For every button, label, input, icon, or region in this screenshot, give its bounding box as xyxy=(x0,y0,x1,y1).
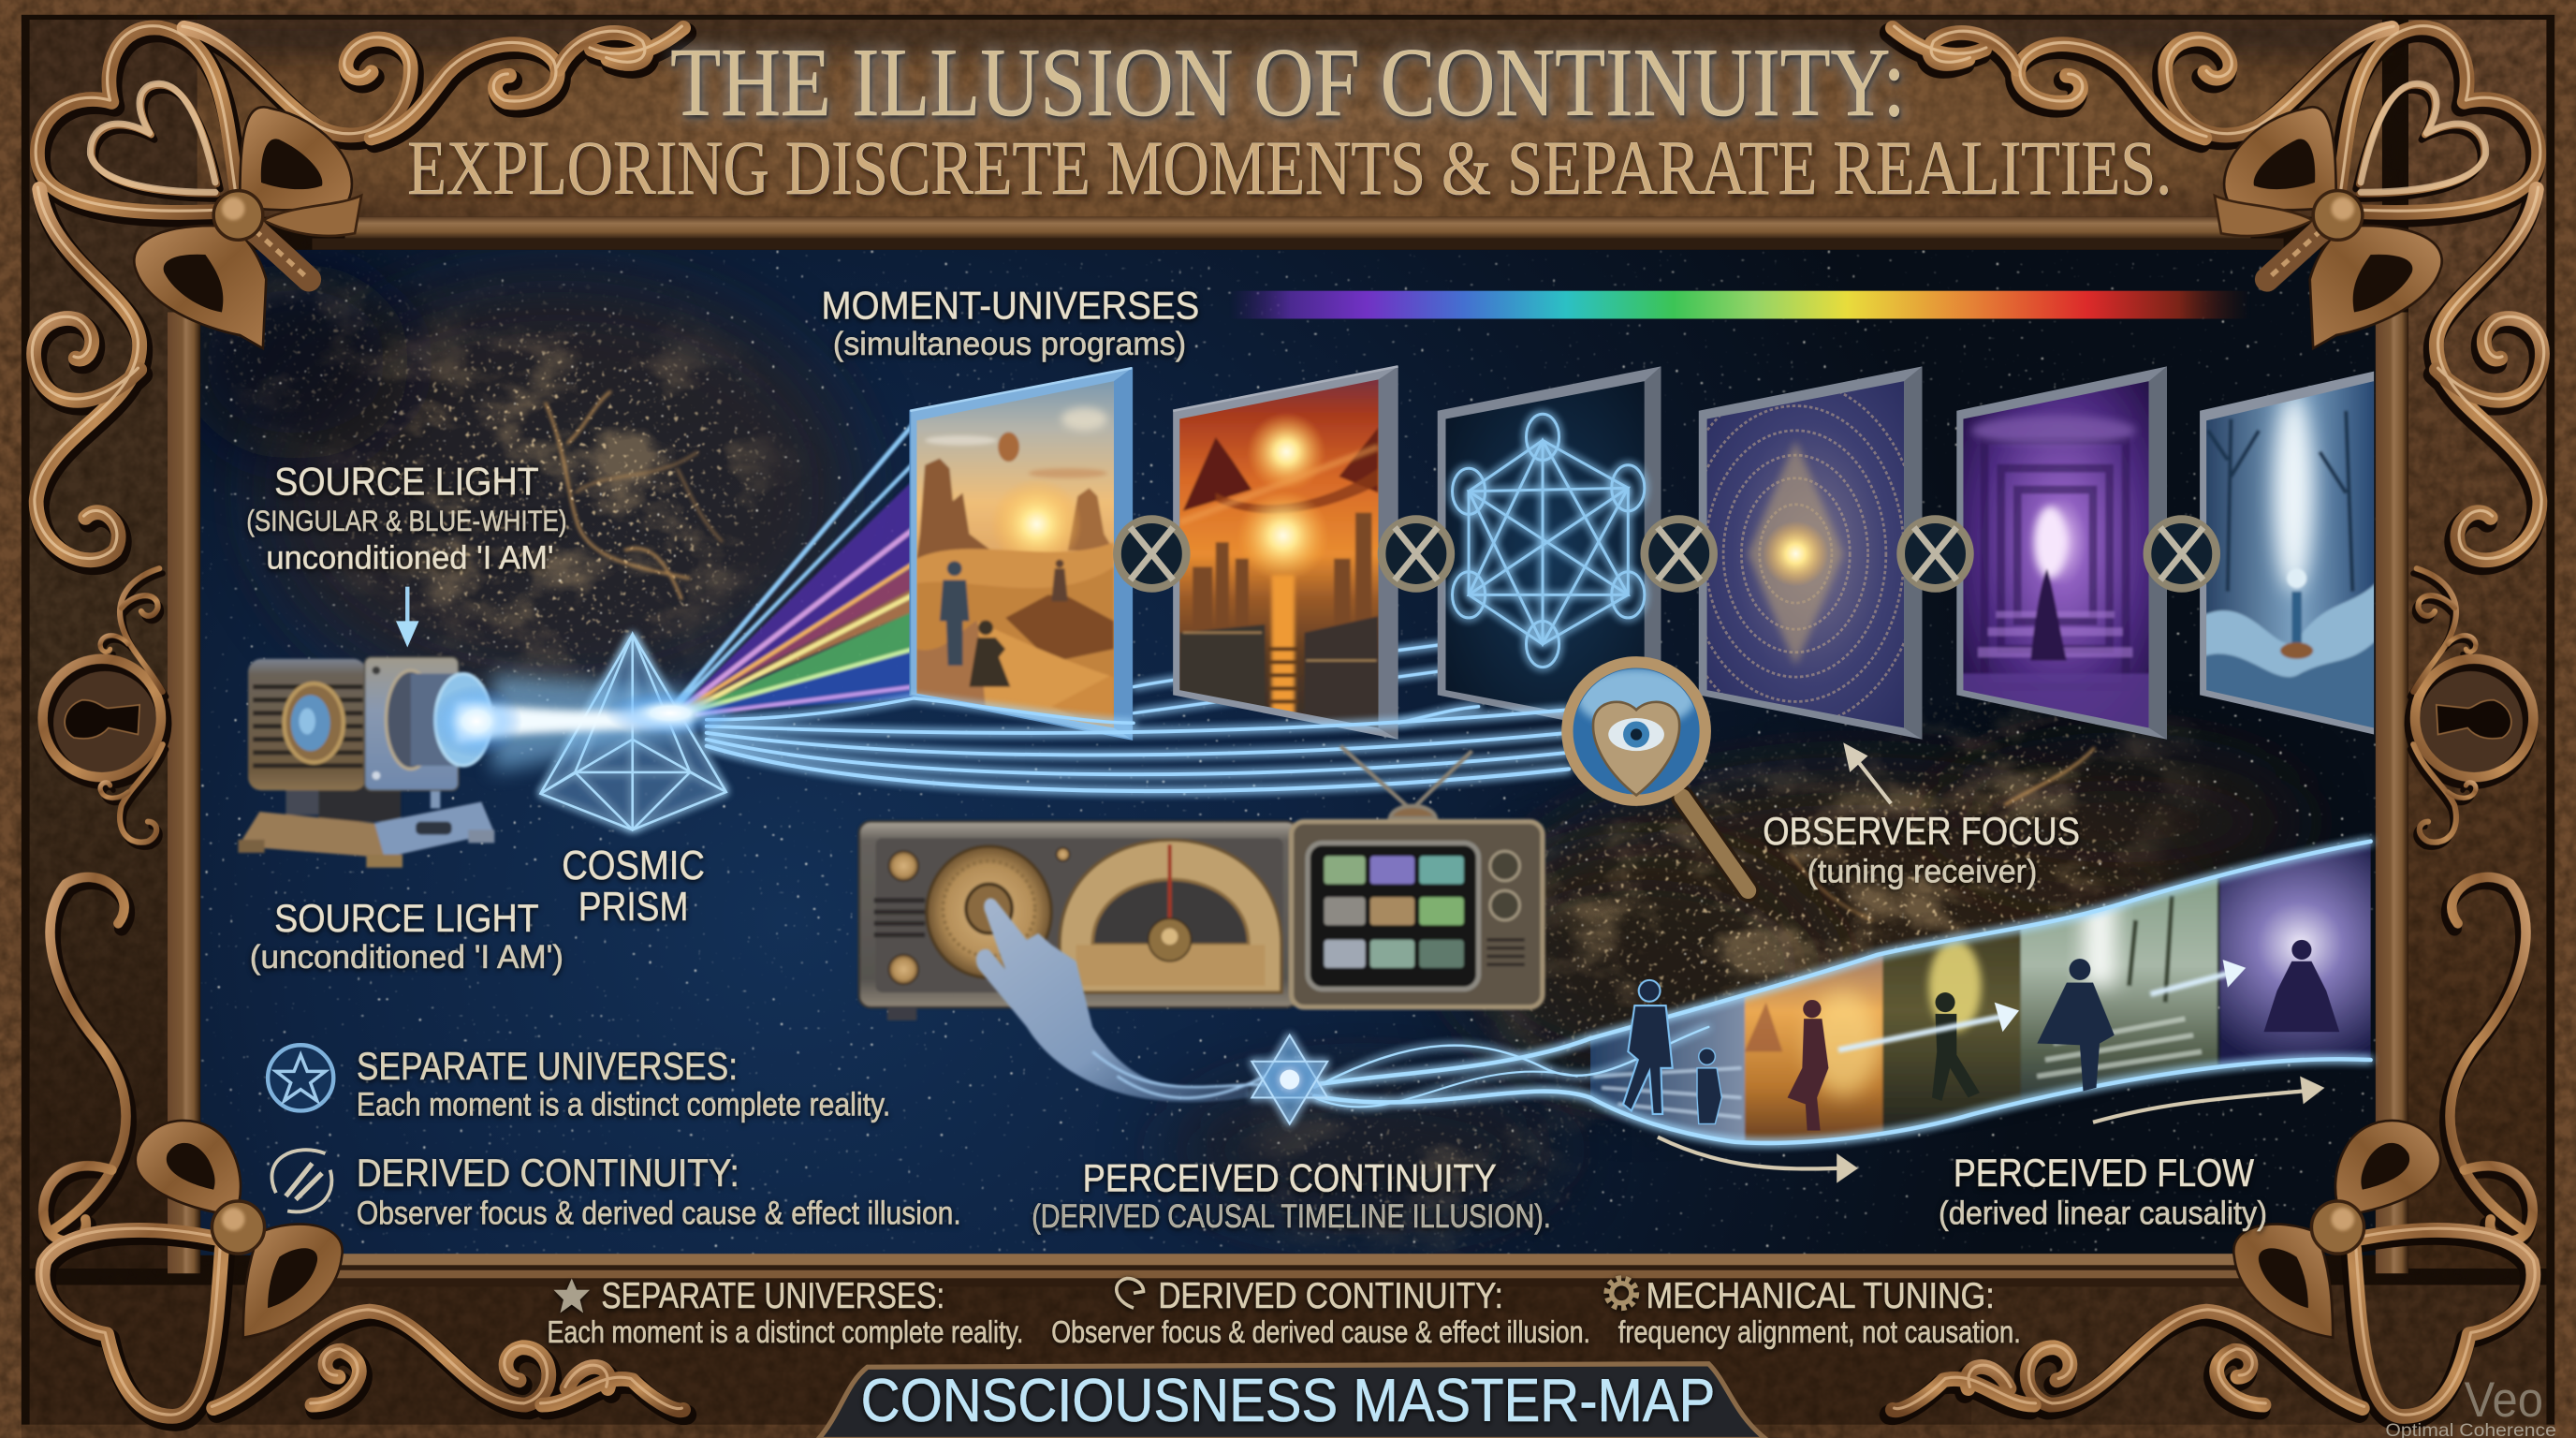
icon: swirl xyxy=(1117,1278,1144,1308)
corner ornament: top left xyxy=(32,26,687,565)
label: source light top: SOURCE LIGHT xyxy=(274,459,539,503)
separator 4 xyxy=(1901,520,1969,588)
label: cosmic prism xyxy=(562,843,705,930)
label: cosmic prism: PRISM xyxy=(578,884,688,930)
watermark xyxy=(2385,1372,2556,1438)
separator 3 xyxy=(1645,520,1714,588)
footer note: derived continuity: Observer focus & derived cause & effect illusion. xyxy=(1051,1315,1590,1350)
corner ornament: bottom left xyxy=(41,1121,687,1421)
label: observer focus: OBSERVER FOCUS xyxy=(1763,809,2080,853)
icon: star xyxy=(553,1278,590,1313)
footer note: derived continuity xyxy=(1051,1276,1590,1350)
right keyhole and scrolls xyxy=(2410,568,2533,1246)
left keyhole and scrolls xyxy=(43,568,166,1246)
legend item: derived continuity xyxy=(271,1150,961,1232)
legend item: separate universes: SEPARATE UNIVERSES: xyxy=(357,1044,738,1088)
legend item: separate universes xyxy=(268,1044,890,1123)
flowing blue lines from prism to magnifier xyxy=(707,698,1569,791)
panel: sacred geometry moment xyxy=(1438,366,1661,740)
panel: mandala moment xyxy=(1669,366,1922,740)
label: source light lower: (unconditioned 'I AM') xyxy=(250,939,564,976)
watermark: Veo xyxy=(2465,1372,2543,1428)
footer note: derived continuity: DERIVED CONTINUITY: xyxy=(1158,1276,1503,1316)
tuning knob xyxy=(927,846,1051,977)
heading: moment-universes: (simultaneous programs) xyxy=(833,326,1186,362)
footer note: mechanical tuning xyxy=(1606,1276,2021,1350)
light beam and prism glow xyxy=(431,674,736,772)
molding frame xyxy=(168,312,2408,1286)
television xyxy=(1292,822,1543,1007)
icon: magnifying glass with heart eye xyxy=(1567,662,1748,890)
ribbon glowing edges xyxy=(1314,842,2371,1143)
panel: cosmic space background xyxy=(181,250,2376,1255)
panel: desert moment xyxy=(910,368,1132,740)
projector base xyxy=(238,785,494,868)
separator 5 xyxy=(2147,520,2217,588)
icon: star in circle xyxy=(268,1045,333,1110)
heading: moment-universes: MOMENT-UNIVERSES xyxy=(822,283,1199,327)
tuner body xyxy=(859,822,1298,1007)
perceived timeline ribbon xyxy=(1314,829,2376,1151)
label: source light top xyxy=(246,459,567,576)
label: perceived flow xyxy=(1939,1151,2267,1232)
starfield xyxy=(200,250,2376,1255)
nebula xyxy=(181,250,2376,1255)
heading: moment-universes xyxy=(822,283,1199,362)
grille xyxy=(874,901,925,935)
legend item: separate universes: Each moment is a distinct complete reality. xyxy=(357,1087,890,1123)
gauge xyxy=(1060,840,1281,992)
antenna xyxy=(1340,746,1472,818)
rainbow spectrum bar xyxy=(1229,291,2250,318)
label: source light top: unconditioned 'I AM' xyxy=(266,539,553,576)
header plaque xyxy=(198,20,2382,250)
label: observer focus xyxy=(1763,809,2080,889)
projector rear lens xyxy=(285,683,344,762)
arrow: perceived flow xyxy=(2093,1077,2324,1123)
label: source light lower xyxy=(250,896,564,976)
legend item: derived continuity: Observer focus & derived cause & effect illusion. xyxy=(357,1196,961,1232)
icon: projector xyxy=(238,657,494,868)
label: source light top: (SINGULAR & BLUE-WHITE) xyxy=(246,504,567,537)
arrow: perceived continuity xyxy=(1658,1137,1858,1183)
icon: gear xyxy=(1606,1278,1636,1308)
footer note: mechanical tuning: frequency alignment, not causation. xyxy=(1618,1315,2021,1350)
separator 2 xyxy=(1382,520,1451,588)
flowing lines behind panels xyxy=(1134,644,1479,723)
panel: violet corridor moment xyxy=(1956,366,2167,740)
footer note: separate universes xyxy=(547,1276,1023,1350)
label: perceived continuity xyxy=(1032,1155,1551,1235)
label: observer focus: (tuning receiver) xyxy=(1808,853,2037,889)
separator circles between panels xyxy=(1117,520,2217,588)
arrow: observer focus xyxy=(1843,742,1891,803)
title: THE ILLUSION OF CONTINUITY: xyxy=(670,27,1906,137)
corner ornament: top right xyxy=(1889,26,2544,565)
footer note: separate universes: Each moment is a distinct complete reality. xyxy=(547,1315,1023,1350)
projector front lens xyxy=(386,670,491,769)
separator 1 xyxy=(1117,520,1186,588)
footer plaque: consciousness master-map: CONSCIOUSNESS MASTER-MAP xyxy=(861,1366,1715,1434)
rainbow rays from prism xyxy=(670,424,914,714)
icon: hand turning the dial xyxy=(976,899,1265,1102)
corner ornament: bottom right xyxy=(1889,1121,2535,1421)
panel: sunset city moment xyxy=(1173,366,1398,740)
ribbon imagery xyxy=(1577,829,2376,1151)
label: perceived flow: PERCEIVED FLOW xyxy=(1954,1151,2254,1195)
small knobs xyxy=(889,848,1070,984)
icon: cosmic prism xyxy=(540,634,726,829)
subtitle: EXPLORING DISCRETE MOMENTS & SEPARATE REALITIES. xyxy=(407,125,2172,211)
radio tuner and television xyxy=(859,746,1543,1020)
label: cosmic prism: COSMIC xyxy=(562,843,705,888)
icon: loop of arrows xyxy=(271,1150,331,1211)
panel: frost forest moment xyxy=(2200,372,2376,740)
arrow: source light down xyxy=(396,587,419,648)
label: perceived flow: (derived linear causality) xyxy=(1939,1196,2267,1232)
label: source light lower: SOURCE LIGHT xyxy=(274,896,539,940)
footer note: mechanical tuning: MECHANICAL TUNING: xyxy=(1647,1276,1995,1316)
figures walking the timeline xyxy=(1623,940,2339,1131)
channel thumbnails xyxy=(1325,856,1464,968)
projector body xyxy=(248,657,459,790)
icon: crystal star node xyxy=(1251,1035,1327,1123)
footer note: separate universes: SEPARATE UNIVERSES: xyxy=(601,1276,944,1316)
label: perceived continuity: PERCEIVED CONTINUITY xyxy=(1083,1155,1497,1199)
ribbon motion arrows xyxy=(1838,960,2246,1050)
label: perceived continuity: (DERIVED CAUSAL TIMELINE ILLUSION). xyxy=(1032,1198,1551,1235)
legend item: derived continuity: DERIVED CONTINUITY: xyxy=(357,1151,739,1195)
